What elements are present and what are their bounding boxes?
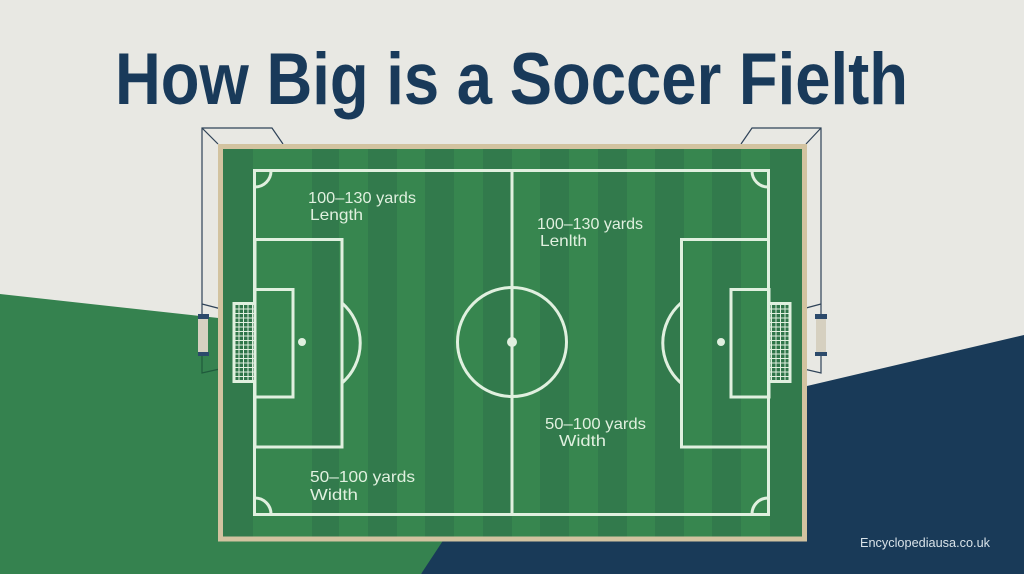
- label: length, left: 100–130 yards: [308, 190, 416, 207]
- pitch markings: [254, 170, 769, 515]
- left goal net: [234, 304, 255, 382]
- center and penalty spots: [298, 337, 725, 347]
- field border: [220, 146, 804, 539]
- label: length, right: Lenlth: [540, 233, 587, 250]
- title: How Big is a Soccer Fielth: [115, 39, 908, 120]
- label: width, right: Width: [559, 433, 606, 450]
- label: length, left: Length: [310, 207, 363, 224]
- label: length, left: [308, 190, 416, 224]
- soccer field: [220, 146, 804, 539]
- label: length, right: [537, 216, 643, 250]
- background: navy wedge: [421, 335, 1024, 574]
- right goal post: [815, 314, 827, 356]
- background: green wedge: [0, 294, 450, 574]
- label: length, right: 100–130 yards: [537, 216, 643, 233]
- watermark: Encyclopediausa.co.uk: [860, 536, 991, 550]
- label: width, left: [310, 469, 415, 504]
- left goal frame outline: [202, 128, 283, 373]
- label: width, right: [545, 416, 646, 450]
- right goal net: [769, 304, 790, 382]
- right goal frame outline: [741, 128, 821, 373]
- mowing stripes: [223, 149, 802, 536]
- label: width, left: Width: [310, 487, 358, 504]
- label: width, left: 50–100 yards: [310, 469, 415, 486]
- label: width, right: 50–100 yards: [545, 416, 646, 433]
- left goal post: [198, 314, 209, 356]
